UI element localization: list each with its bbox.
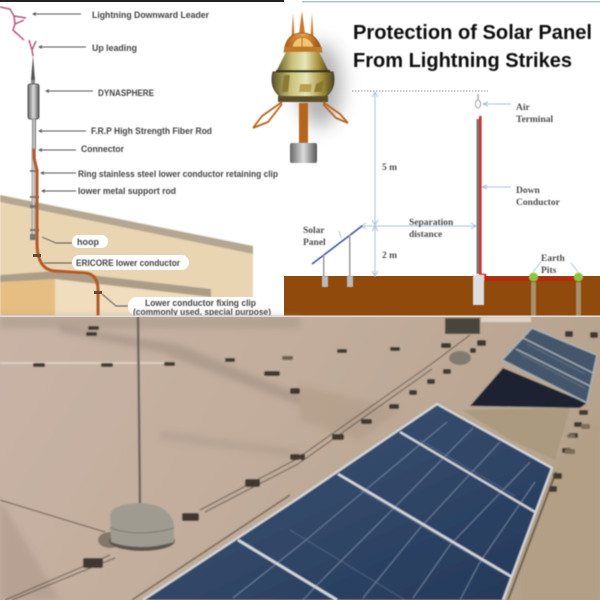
Dynasphere body: [28, 84, 39, 119]
diagram labels: distance: [409, 230, 442, 240]
roof shading: [0, 316, 600, 600]
diagram labels: Terminal: [516, 115, 553, 125]
icon: lightning bolt: [0, 7, 36, 56]
cable supports: [33, 326, 598, 568]
diagram labels: Solar: [303, 226, 325, 236]
diagram labels: 2 m: [382, 251, 397, 261]
gold body: [276, 52, 329, 72]
building: [0, 195, 253, 316]
photo: rooftop with solar panels: [0, 316, 600, 600]
height reference line: [352, 90, 488, 92]
diagram labels: Air: [516, 103, 530, 113]
leader labels: F.R.P High Strength Fiber Rod: [91, 126, 212, 136]
solar panel: [312, 226, 362, 264]
diagram labels: 5 m: [382, 163, 397, 173]
diagram labels: Separation: [409, 218, 454, 228]
title: Protection of Solar Panel: [353, 22, 592, 44]
air terminal and mast: [312, 94, 583, 316]
far roof box and base: [445, 318, 480, 334]
callout pills: [72, 235, 108, 248]
leader labels: Lightning Downward Leader: [92, 10, 209, 20]
title: From Lightning Strikes: [353, 50, 572, 72]
main solar array: [132, 404, 556, 600]
cell grid: [233, 422, 535, 600]
diagram labels: Earth: [541, 254, 565, 264]
diagram labels: [303, 103, 565, 276]
dome: [284, 33, 322, 52]
leader labels: hoop: [77, 237, 99, 247]
spikes: [291, 11, 314, 45]
diagram labels: Down: [516, 186, 540, 196]
leader labels: (commonly used, special purpose): [133, 307, 271, 317]
title: [353, 22, 592, 72]
air terminal rod: [28, 55, 39, 240]
dimension arrows: [339, 92, 578, 276]
lightning mast: [138, 317, 140, 505]
ground: [284, 276, 600, 316]
diagram labels: Panel: [303, 238, 326, 248]
far solar panel: [502, 328, 597, 403]
icon: air terminal product: [253, 11, 348, 163]
leader labels: lower metal support rod: [78, 186, 176, 196]
copper legs: [253, 102, 348, 128]
concrete base: [98, 503, 175, 551]
leader labels: ERICORE lower conductor: [76, 258, 180, 268]
base: [290, 143, 317, 163]
diagram labels: Pits: [541, 266, 557, 276]
down conductor: [34, 149, 98, 316]
diagram labels: Conductor: [516, 198, 561, 208]
leader labels: Up leading: [92, 43, 137, 53]
leader labels: DYNASPHERE: [98, 88, 154, 98]
down conductor to earth pits: [481, 275, 580, 279]
divider between diagram and photo: [0, 316, 600, 317]
reflective facets: [276, 70, 330, 92]
leader arrows: [33, 12, 128, 306]
leader labels: Connector: [81, 144, 124, 154]
top edge strip: [0, 0, 302, 2]
panel: solar protection diagram: [284, 0, 600, 316]
earth pits: [531, 282, 536, 316]
panel: lightning rod diagram: [0, 0, 302, 317]
shaft: [299, 103, 308, 143]
panel frames: [143, 404, 552, 600]
leader labels: [76, 10, 278, 317]
shadow of far panel: [470, 368, 587, 408]
leader labels: Lower conductor fixing clip: [145, 298, 256, 308]
cables: [0, 335, 470, 600]
leader labels: Ring stainless steel lower conductor retaining clip: [78, 169, 278, 179]
